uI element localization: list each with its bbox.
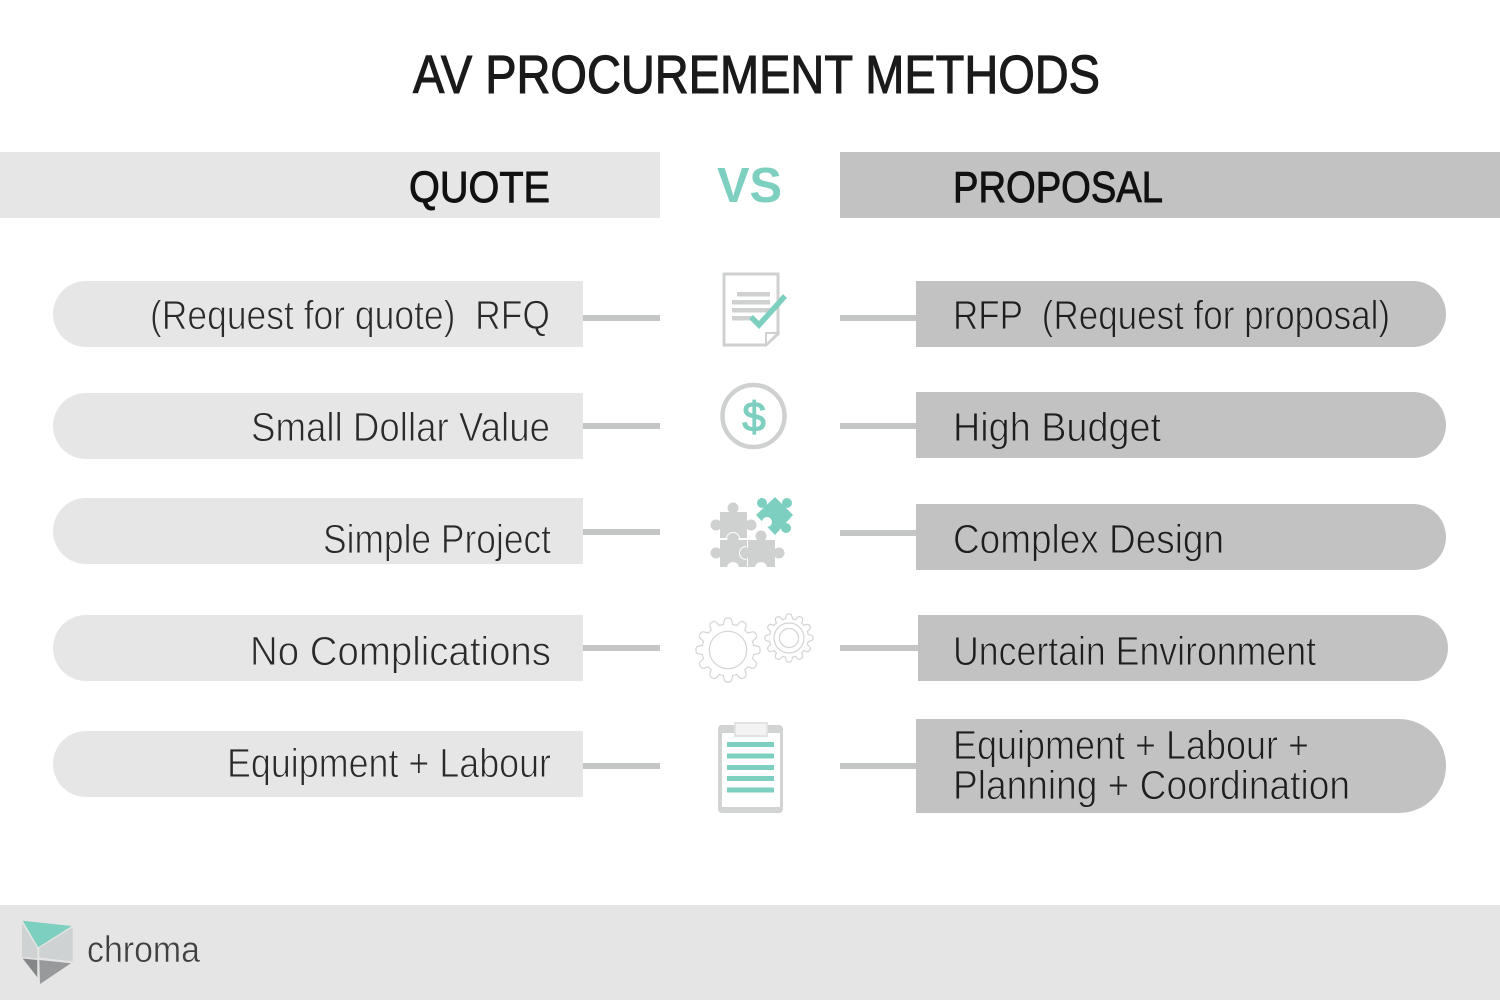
icon: clipboard — [718, 723, 783, 813]
proposal row: complex design — [840, 504, 1446, 570]
title: AV PROCUREMENT METHODS — [413, 45, 1100, 105]
proposal row: equipment, labour, planning, coordination: Planning + Coordination — [953, 762, 1350, 808]
proposal row: complex design: Complex Design — [953, 516, 1224, 562]
proposal row: uncertain environment: Uncertain Environment — [953, 628, 1317, 674]
quote row: no complications: No Complications — [250, 628, 551, 674]
quote row: no complications — [53, 615, 660, 681]
quote row: dollar value — [53, 393, 660, 459]
icon: gears — [696, 614, 813, 682]
quote row: equipment and labour: Equipment + Labour — [227, 740, 551, 786]
quote row: dollar value: Small Dollar Value — [251, 404, 550, 450]
header: proposal — [840, 152, 1500, 218]
icon: dollar coin: $ — [742, 393, 766, 440]
footer band — [0, 905, 1500, 1000]
quote row: RFQ: (Request for quote) RFQ — [150, 292, 550, 338]
chroma logo: chroma — [87, 929, 200, 970]
quote row: equipment and labour — [53, 731, 660, 797]
header: quote: QUOTE — [409, 163, 550, 212]
icon: document with check — [724, 274, 785, 345]
proposal row: equipment, labour, planning, coordination — [840, 719, 1446, 813]
proposal row: RFP — [840, 281, 1446, 347]
proposal row: equipment, labour, planning, coordination: Equipment + Labour + — [953, 722, 1309, 768]
quote row: RFQ — [53, 281, 660, 347]
proposal row: high budget: High Budget — [953, 404, 1162, 450]
header: proposal: PROPOSAL — [953, 163, 1163, 212]
quote row: simple project — [53, 498, 660, 564]
icon: dollar coin — [722, 385, 784, 447]
proposal row: high budget — [840, 392, 1446, 458]
header: quote — [0, 152, 660, 218]
icon: puzzle pieces — [710, 497, 793, 574]
proposal row: uncertain environment — [840, 615, 1448, 681]
quote row: simple project: Simple Project — [323, 516, 552, 562]
proposal row: RFP: RFP (Request for proposal) — [953, 292, 1390, 338]
vs label: VS — [717, 159, 782, 213]
chroma logo — [22, 921, 200, 984]
